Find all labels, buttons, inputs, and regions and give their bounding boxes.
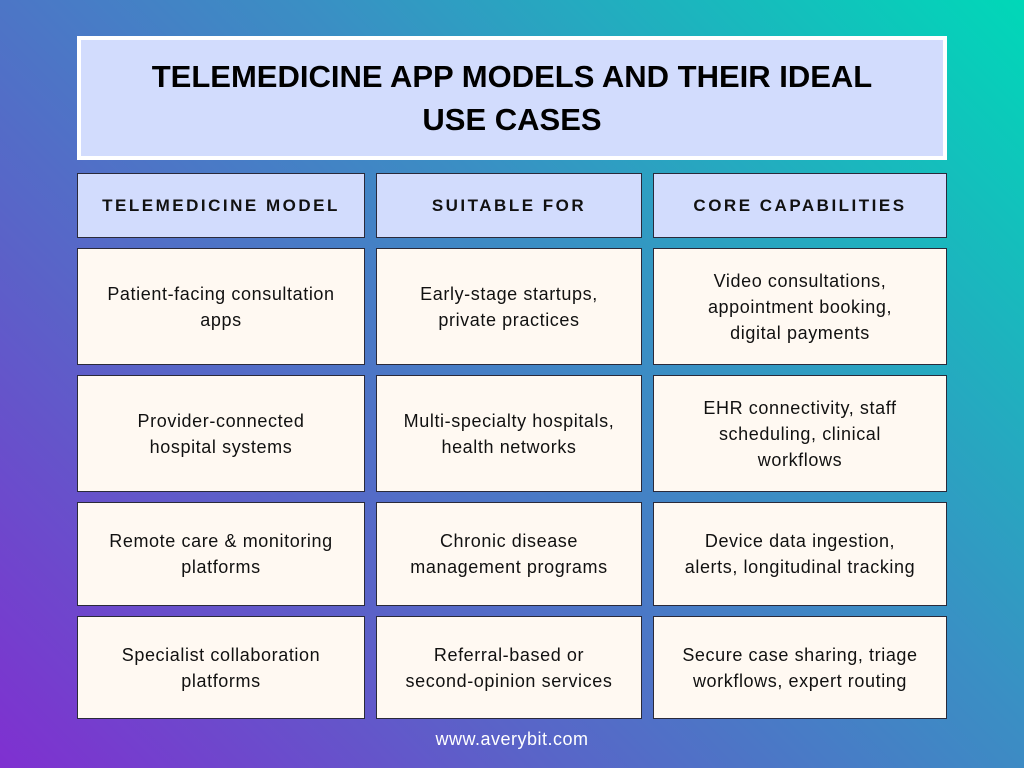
row 2 suitable: health networks (441, 436, 577, 456)
row 2 suitable: Multi-specialty hospitals, (404, 410, 614, 430)
row 4 suitable (376, 616, 642, 719)
row 1 suitable: private practices (438, 310, 580, 330)
row 2 suitable (376, 375, 642, 492)
row 4 model (77, 616, 365, 719)
row 4 model: Specialist collaboration (122, 644, 320, 664)
header: model: TELEMEDICINE MODEL (102, 196, 340, 214)
row 2 model: Provider-connected (138, 410, 304, 430)
title (77, 36, 947, 160)
row 1 capabilities: digital payments (730, 322, 870, 342)
title: TELEMEDICINE APP MODELS AND THEIR IDEAL (152, 59, 872, 94)
row 4 suitable: Referral-based or (434, 644, 584, 664)
row 3 capabilities: Device data ingestion, (705, 531, 895, 551)
row 1 capabilities: appointment booking, (708, 296, 892, 316)
row 4 capabilities: Secure case sharing, triage (682, 644, 918, 664)
row 4 capabilities: workflows, expert routing (693, 670, 907, 690)
row 2 capabilities: workflows (758, 450, 842, 470)
row 1 model (77, 248, 365, 365)
header: capabilities (653, 173, 947, 238)
row 2 capabilities: EHR connectivity, staff (703, 398, 897, 418)
row 1 suitable: Early-stage startups, (420, 284, 598, 304)
row 1 model: apps (200, 310, 242, 330)
row 3 capabilities: alerts, longitudinal tracking (685, 557, 915, 577)
row 1 model: Patient-facing consultation (107, 284, 335, 304)
row 4 capabilities (653, 616, 947, 719)
row 3 model: platforms (181, 557, 261, 577)
row 2 model (77, 375, 365, 492)
row 3 capabilities (653, 502, 947, 606)
header: capabilities: CORE CAPABILITIES (693, 196, 907, 214)
row 3 suitable (376, 502, 642, 606)
row 4 model: platforms (181, 670, 261, 690)
row 2 model: hospital systems (150, 436, 292, 456)
row 1 suitable (376, 248, 642, 365)
header: suitable for (376, 173, 642, 238)
title: USE CASES (422, 102, 602, 137)
row 2 capabilities: scheduling, clinical (719, 424, 881, 444)
row 3 model (77, 502, 365, 606)
row 1 capabilities (653, 248, 947, 365)
row 4 suitable: second-opinion services (406, 670, 612, 690)
header: suitable for: SUITABLE FOR (432, 196, 586, 214)
row 3 model: Remote care & monitoring (109, 531, 333, 551)
header: model (77, 173, 365, 238)
row 3 suitable: management programs (410, 557, 608, 577)
row 3 suitable: Chronic disease (440, 531, 578, 551)
row 2 capabilities (653, 375, 947, 492)
row 1 capabilities: Video consultations, (714, 270, 886, 290)
footer url: www.averybit.com (435, 729, 589, 749)
